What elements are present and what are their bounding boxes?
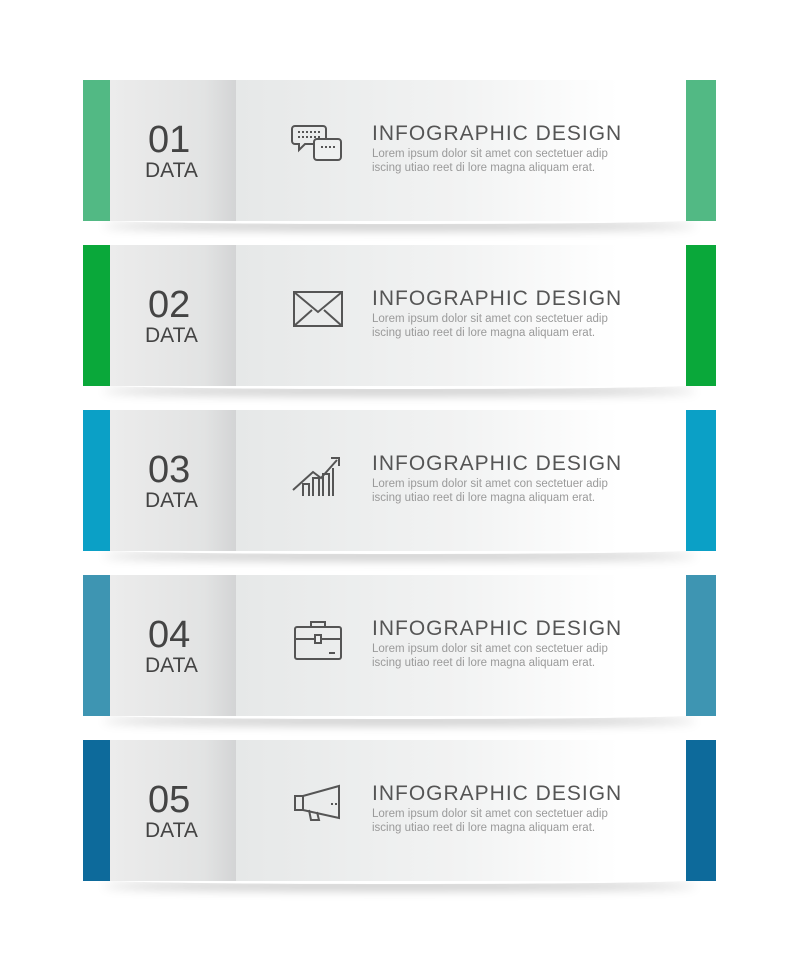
left color bar 5: [83, 740, 110, 881]
text 1: [372, 148, 608, 174]
number 04: 04: [148, 614, 190, 656]
text 4: [372, 643, 608, 669]
right color bar 4: [686, 575, 716, 716]
label DATA: DATA: [145, 654, 198, 677]
text 2: [372, 313, 608, 339]
right color bar 3: [686, 410, 716, 551]
text 1: Lorem ipsum dolor sit amet con sectetuer adip: [372, 148, 608, 160]
right color bar 2: [686, 245, 716, 386]
text 5: [372, 808, 608, 834]
text 2: Lorem ipsum dolor sit amet con sectetuer adip: [372, 313, 608, 325]
label DATA: DATA: [145, 159, 198, 182]
left color bar 1: [83, 80, 110, 221]
right color bar 5: [686, 740, 716, 881]
number 03: 03: [148, 449, 190, 491]
row 1: [83, 80, 716, 236]
text 1: iscing utiao reet di lore magna aliquam erat.: [372, 162, 595, 174]
text 5: iscing utiao reet di lore magna aliquam erat.: [372, 822, 595, 834]
number 05: 05: [148, 779, 190, 821]
title 3: INFOGRAPHIC DESIGN: [372, 452, 622, 475]
left color bar 2: [83, 245, 110, 386]
left color bar 3: [83, 410, 110, 551]
right color bar 1: [686, 80, 716, 221]
label DATA: DATA: [145, 324, 198, 347]
text 3: Lorem ipsum dolor sit amet con sectetuer adip: [372, 478, 608, 490]
text 4: Lorem ipsum dolor sit amet con sectetuer adip: [372, 643, 608, 655]
left color bar 4: [83, 575, 110, 716]
icon: chat bubbles: [291, 125, 342, 161]
title 5: INFOGRAPHIC DESIGN: [372, 782, 622, 805]
icon: megaphone: [294, 784, 340, 821]
number 02: 02: [148, 284, 190, 326]
icon: envelope: [293, 291, 343, 327]
title 2: INFOGRAPHIC DESIGN: [372, 287, 622, 310]
row 3: [83, 410, 716, 566]
label DATA: DATA: [145, 489, 198, 512]
text 3: iscing utiao reet di lore magna aliquam erat.: [372, 492, 595, 504]
text 4: iscing utiao reet di lore magna aliquam erat.: [372, 657, 595, 669]
icon: briefcase: [294, 621, 342, 660]
icon: growth chart: [292, 457, 340, 496]
title 1: INFOGRAPHIC DESIGN: [372, 122, 622, 145]
label DATA: DATA: [145, 819, 198, 842]
row 2: [83, 245, 716, 400]
row 4: [83, 575, 716, 730]
text 2: iscing utiao reet di lore magna aliquam erat.: [372, 327, 595, 339]
number 01: 01: [148, 119, 190, 161]
title 4: INFOGRAPHIC DESIGN: [372, 617, 622, 640]
text 5: Lorem ipsum dolor sit amet con sectetuer adip: [372, 808, 608, 820]
text 3: [372, 478, 608, 504]
row 5: [83, 740, 716, 896]
